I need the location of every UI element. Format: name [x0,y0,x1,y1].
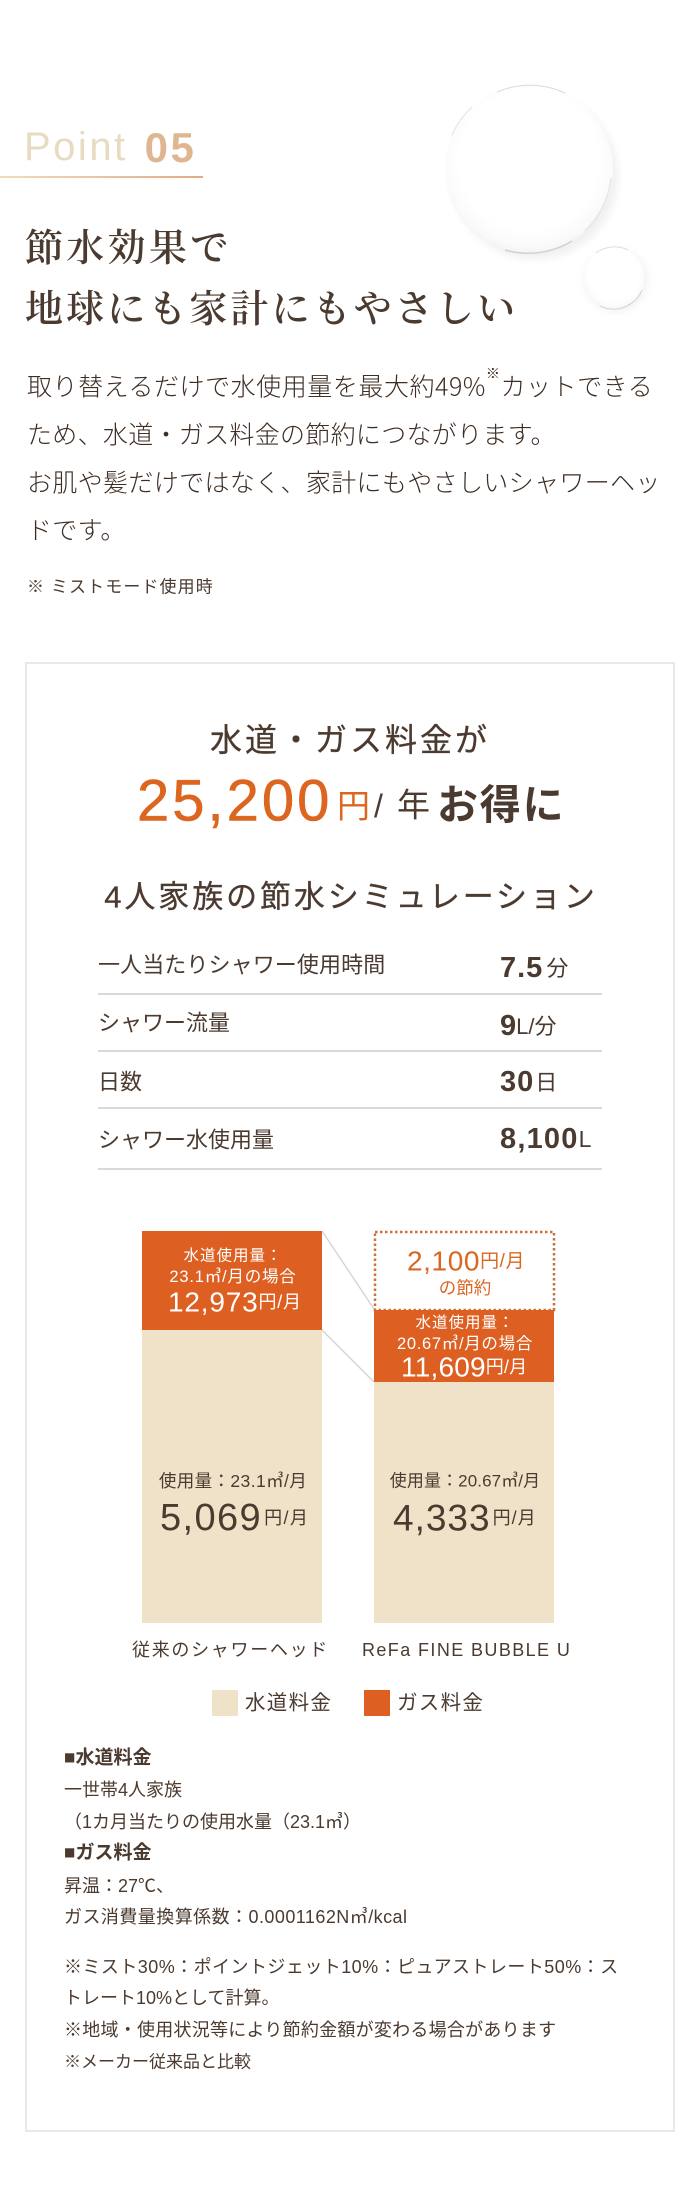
savings headline: お得に [437,782,565,828]
simulation table: 30日 [500,1066,558,1098]
simulation table: 9L/分 [500,1010,556,1042]
notes: 昇温：27℃、 [64,1876,174,1896]
connector lines [322,1231,374,1382]
bar: conventional shower head: 5,069円/月 [160,1497,309,1539]
simulation title: 4人家族の節水シミュレーション [104,880,598,914]
savings box: の節約 [439,1278,491,1298]
bar: ReFa FINE BUBBLE U: 水道使用量： [415,1314,515,1332]
bar: ReFa FINE BUBBLE U: 20.67㎥/月の場合 [397,1334,533,1353]
legend [212,1690,484,1716]
savings headline: 円 [337,788,370,824]
simulation table [98,952,602,1170]
body text: カットできる [500,368,653,404]
savings headline: 25,200 [137,768,332,834]
notes: 一世帯4人家族 [64,1780,182,1800]
body text: ※ [486,364,500,384]
savings headline [137,722,565,834]
savings box: 2,100円/月 [407,1246,525,1276]
bar: conventional shower head: 23.1㎥/月の場合 [169,1267,297,1286]
bar: conventional shower head: 使用量：23.1㎥/月 [159,1471,307,1491]
bar labels: 従来のシャワーヘッド [132,1640,329,1660]
notes: ■ガス料金 [64,1842,151,1864]
notes: ガス消費量換算係数：0.0001162N㎥/kcal [64,1907,407,1927]
savings headline: 水道・ガス料金が [210,722,490,758]
footnote: ※ ミストモード使用時 [27,576,214,596]
simulation table: シャワー水使用量 [98,1128,274,1152]
notes: ※メーカー従来品と比較 [64,2052,251,2072]
notes: （1カ月当たりの使用水量（23.1㎥） [64,1812,361,1832]
simulation table: 日数 [98,1070,142,1094]
simulation table: 8,100L [500,1123,593,1155]
legend: 水道料金 [245,1692,332,1714]
savings box [375,1232,554,1310]
heading: 地球にも家計にもやさしい [25,289,518,331]
bar: ReFa FINE BUBBLE U: 使用量：20.67㎥/月 [390,1470,540,1490]
legend: ガス料金 [397,1692,484,1714]
icon: water droplets [445,85,647,311]
bar labels [132,1640,571,1660]
bar: ReFa FINE BUBBLE U: 4,333円/月 [393,1498,537,1538]
simulation table: 一人当たりシャワー使用時間 [98,952,385,978]
notes: ■水道料金 [64,1746,151,1768]
body text: お肌や髪だけではなく、家計にもやさしいシャワーヘッ [27,464,661,500]
body text: ドです。 [27,511,126,547]
savings headline: / [374,788,383,824]
bar labels: ReFa FINE BUBBLE U [362,1640,571,1660]
heading: 節水効果で [25,228,232,270]
simulation table: シャワー流量 [98,1010,230,1036]
notes: トレート10%として計算。 [64,1988,280,2008]
body text [27,364,661,547]
heading [25,228,518,331]
body text: 取り替えるだけで水使用量を最大約49% [27,368,486,404]
bar: conventional shower head [142,1231,322,1623]
savings headline: 年 [397,786,430,824]
bar chart [132,1231,571,1660]
bar: conventional shower head: 水道使用量： [183,1246,283,1264]
notes: ※地域・使用状況等により節約金額が変わる場合があります [64,2020,556,2040]
bar: ReFa FINE BUBBLE U: 11,609円/月 [401,1352,527,1382]
body text: ため、水道・ガス料金の節約につながります。 [27,416,556,452]
panel: simulation card [26,663,674,2131]
point label: Point 05 [24,124,196,170]
simulation table: 7.5分 [500,952,569,984]
notes [64,1746,619,2072]
bar: ReFa FINE BUBBLE U [374,1310,554,1623]
notes: ※ミスト30%：ポイントジェット10%：ピュアストレート50%：ス [64,1957,619,1977]
bar: conventional shower head: 12,973円/月 [168,1286,302,1318]
